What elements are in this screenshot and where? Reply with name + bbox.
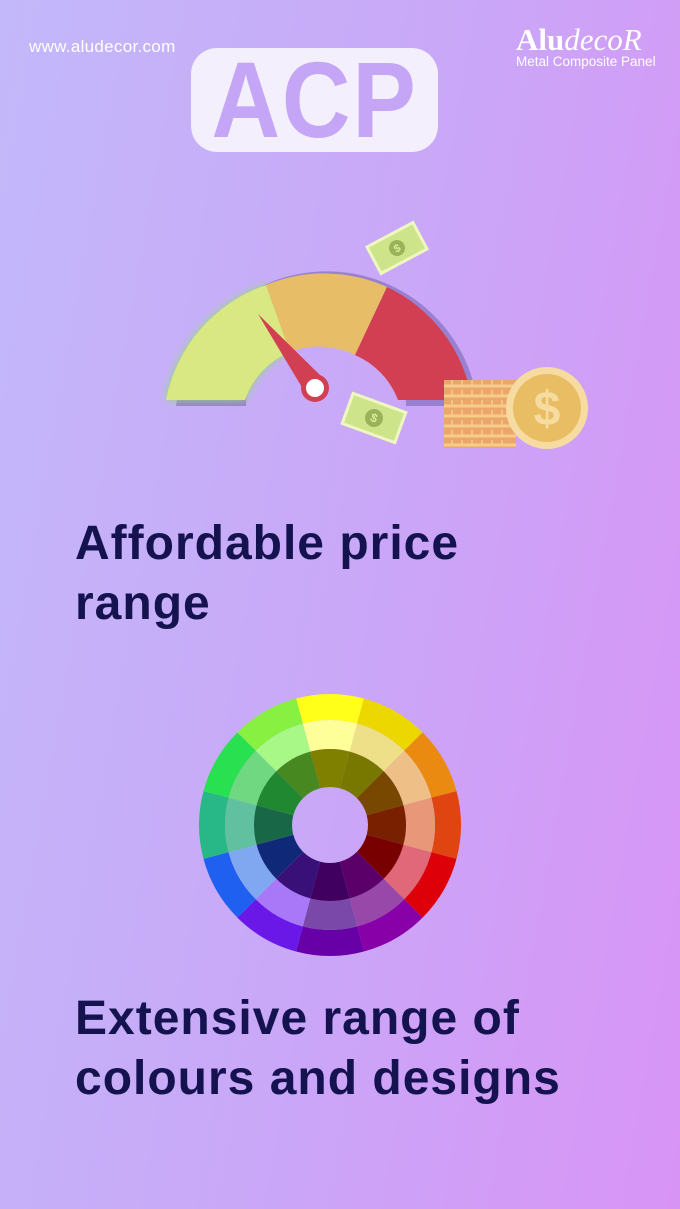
money bill bottom bbox=[342, 393, 406, 443]
needle bbox=[258, 314, 325, 394]
logo bbox=[516, 22, 656, 69]
logo: Metal Composite Panel bbox=[516, 54, 656, 69]
heading: affordable bbox=[75, 517, 459, 630]
url text: www.aludecor.com bbox=[29, 37, 176, 56]
coin bbox=[506, 367, 588, 449]
coin stack bbox=[444, 380, 516, 448]
money bill bottom: $ bbox=[368, 410, 380, 426]
heading: affordable: Affordable price bbox=[75, 517, 459, 570]
coin: $ bbox=[534, 383, 561, 436]
gauge bbox=[166, 271, 478, 406]
heading: colours: Extensive range of bbox=[75, 992, 520, 1045]
heading: affordable: range bbox=[75, 577, 211, 630]
color wheel bbox=[198, 694, 462, 956]
heading: colours: colours and designs bbox=[75, 1052, 561, 1105]
money bill top: $ bbox=[392, 242, 403, 256]
gauge illustration bbox=[162, 220, 588, 449]
heading: colours bbox=[75, 992, 561, 1105]
title badge: ACP bbox=[212, 39, 417, 160]
money bill top bbox=[367, 223, 427, 273]
logo: AludecoR bbox=[516, 22, 642, 57]
